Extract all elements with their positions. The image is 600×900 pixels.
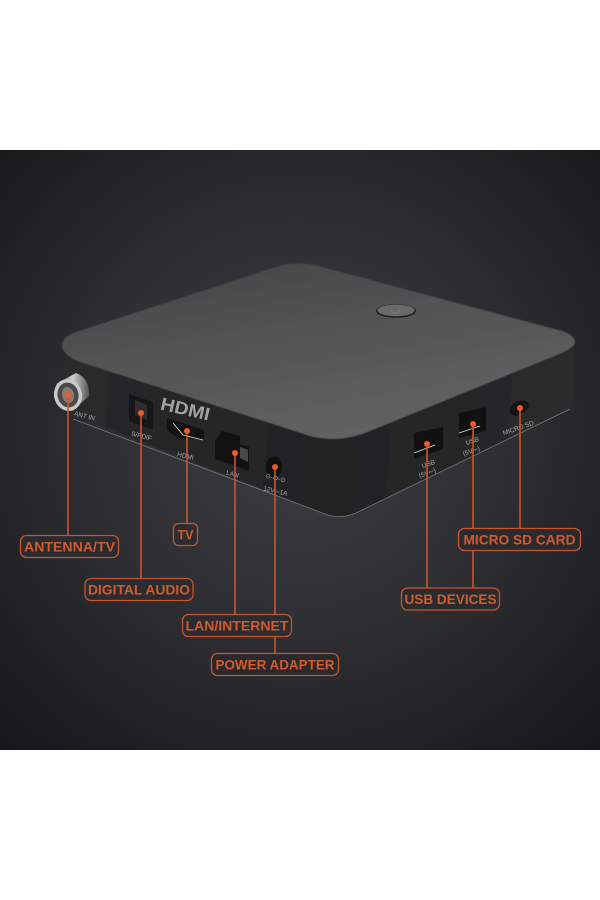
dark background panel	[0, 150, 600, 750]
port: power jack: ⊙-⊙-⊙	[264, 473, 287, 485]
label: lan/internet	[182, 614, 292, 636]
bottom edge highlight	[73, 409, 570, 517]
device side walls	[62, 342, 575, 517]
port: micro SD: MICRO SD	[502, 420, 535, 437]
label: micro sd card: MICRO SD CARD	[464, 532, 576, 548]
port: micro SD	[502, 397, 535, 437]
port: antenna connector	[51, 373, 96, 423]
port: power jack	[263, 456, 289, 498]
label: usb devices: USB DEVICES	[404, 591, 496, 607]
port: S/PDIF	[129, 394, 153, 442]
port: USB 1: (5V⎓)	[418, 467, 437, 480]
icon: power button	[376, 304, 416, 318]
device: set-top box	[51, 264, 575, 517]
port: HDMI	[167, 418, 204, 462]
label: power adapter: POWER ADAPTER	[216, 656, 334, 672]
HDMI logo: HDMI	[159, 394, 212, 425]
label: digital audio	[85, 578, 193, 600]
label: micro sd card	[458, 528, 580, 550]
label: tv: TV	[178, 526, 194, 542]
port: USB 1	[414, 427, 443, 480]
label: tv	[174, 524, 198, 546]
label: lan/internet: LAN/INTERNET	[186, 618, 289, 634]
label: antenna/tv	[20, 536, 118, 558]
port: power jack: 12V⎓1A	[263, 485, 289, 498]
port: LAN: LAN	[225, 470, 240, 480]
port: LAN	[215, 431, 249, 480]
port: antenna connector: ANT IN	[73, 411, 96, 423]
port: USB 2: USB	[465, 436, 480, 447]
port: HDMI: HDMI	[176, 451, 194, 462]
label: antenna/tv: ANTENNA/TV	[24, 538, 116, 554]
label: digital audio: DIGITAL AUDIO	[88, 582, 190, 598]
port: USB 1: USB	[421, 459, 436, 470]
callout lines	[68, 395, 520, 653]
port: S/PDIF: S/PDIF	[130, 431, 152, 442]
device top surface	[62, 264, 575, 439]
port: USB 2: (5V⎓)	[462, 445, 481, 458]
callout dots	[65, 392, 523, 470]
port: USB 2	[459, 407, 486, 458]
